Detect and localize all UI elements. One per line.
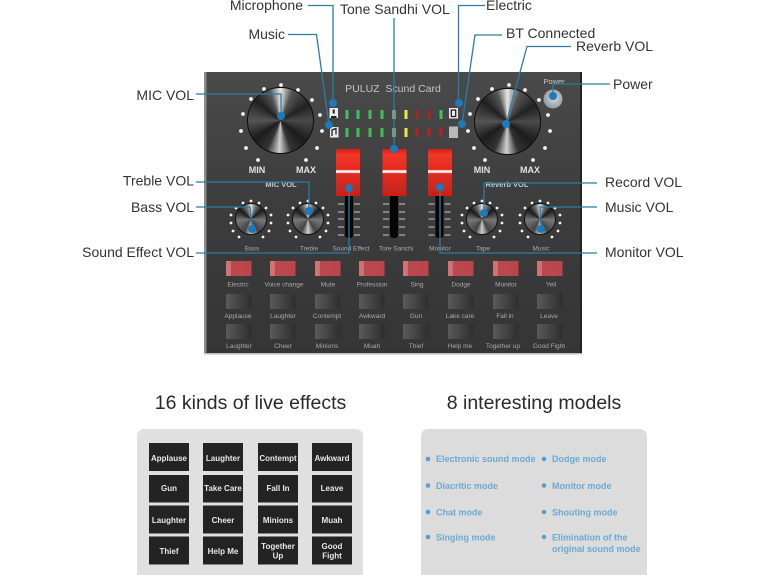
tick dots: right main knob bbox=[466, 83, 552, 162]
callout: BT Connected: BT Connected bbox=[506, 25, 595, 41]
control labels: Tape bbox=[476, 246, 490, 252]
knob: Reverb VOL bbox=[474, 88, 541, 155]
effect tile labels: Good bbox=[322, 542, 343, 551]
effect labels row 1: Lake care bbox=[446, 313, 475, 320]
tick dots: left main knob bbox=[239, 83, 324, 162]
knob scale labels: MAX bbox=[520, 165, 540, 175]
effect labels row 1: Awkward bbox=[359, 313, 386, 320]
section labels: Reverb VOL bbox=[486, 180, 529, 189]
model labels: Diacritic mode bbox=[436, 481, 498, 491]
mode button labels: Monitor bbox=[495, 282, 518, 288]
power label: Power bbox=[543, 77, 565, 86]
callout: Music VOL bbox=[537, 199, 674, 233]
effect labels row 1: Fall in bbox=[496, 313, 514, 320]
effect tile labels: Together bbox=[261, 542, 295, 551]
callout: Treble VOL: Treble VOL bbox=[123, 172, 194, 188]
effect tile labels: Fight bbox=[322, 552, 342, 560]
mode button labels: Yell bbox=[546, 282, 557, 288]
knob scale labels: MIN bbox=[249, 165, 265, 175]
effect tile labels: Help Me bbox=[208, 547, 239, 556]
knob: Music bbox=[524, 203, 556, 235]
icon: music indicator bbox=[330, 127, 338, 138]
mode button labels: Voice change bbox=[264, 282, 304, 288]
callout: Reverb VOL bbox=[502, 38, 653, 128]
effect tile labels: Awkward bbox=[315, 454, 350, 463]
callout: MIC VOL: MIC VOL bbox=[136, 87, 194, 103]
effect labels row 1: Leave bbox=[540, 313, 558, 320]
callout: Power: Power bbox=[613, 76, 653, 92]
callout: Record VOL: Record VOL bbox=[605, 174, 682, 190]
panel: models bbox=[421, 429, 647, 575]
callout: Sound Effect VOL bbox=[82, 184, 353, 260]
red mode buttons bbox=[226, 261, 562, 276]
LED meter bbox=[346, 110, 442, 137]
effect labels row 1 bbox=[224, 313, 558, 320]
callout: Monitor VOL: Monitor VOL bbox=[605, 244, 684, 260]
effect tile labels: Cheer bbox=[212, 516, 234, 525]
control labels: Monitor bbox=[429, 246, 452, 252]
callout: Music VOL: Music VOL bbox=[605, 199, 674, 215]
mode button labels: Sing bbox=[410, 282, 424, 288]
effect labels row 2 bbox=[226, 343, 565, 350]
dark effect buttons row 2 bbox=[226, 324, 562, 339]
callout: Monitor VOL bbox=[436, 183, 684, 260]
callout: MIC VOL bbox=[136, 87, 285, 120]
callout: BT Connected bbox=[458, 25, 595, 128]
knob scale labels: MIN bbox=[474, 165, 490, 175]
icon: microphone indicator bbox=[330, 108, 338, 118]
section labels: MIC VOL bbox=[265, 180, 297, 189]
heading: models: 8 interesting models bbox=[447, 392, 622, 414]
model labels: Dodge mode bbox=[552, 454, 607, 464]
knob: Bass bbox=[235, 203, 267, 235]
effect labels row 2: Laughter bbox=[226, 343, 253, 350]
power button bbox=[544, 90, 562, 108]
effect labels row 2: Cheer bbox=[274, 343, 293, 350]
model labels: Elimination of the bbox=[552, 532, 628, 542]
effect labels row 1: Contempt bbox=[313, 313, 341, 320]
card title: PULUZ Scund Card bbox=[345, 83, 441, 95]
section labels bbox=[265, 180, 529, 189]
control labels: Bass bbox=[245, 246, 260, 252]
model labels bbox=[436, 454, 641, 554]
control labels: Tore Sanchi bbox=[379, 246, 413, 252]
effect tile labels: Gun bbox=[161, 484, 177, 493]
knob scale labels: MAX bbox=[296, 165, 316, 175]
effect tile labels: Applause bbox=[151, 454, 188, 463]
effect labels row 2: Muah bbox=[364, 343, 381, 350]
effect labels row 1: Gun bbox=[410, 313, 423, 320]
effect tile labels: Take Care bbox=[204, 484, 242, 493]
panel: live effects bbox=[137, 429, 363, 575]
effect tile labels: Minions bbox=[263, 516, 294, 525]
effect labels row 2: Together up bbox=[486, 343, 521, 350]
effect tile labels: Thief bbox=[159, 547, 179, 556]
model labels: original sound mode bbox=[552, 544, 641, 554]
dark effect buttons row 1 bbox=[226, 294, 562, 309]
model labels: Chat mode bbox=[436, 508, 483, 518]
effect labels row 2: Thief bbox=[409, 343, 423, 350]
tick dots: small knobs bbox=[230, 200, 561, 238]
knob: Tape bbox=[466, 203, 498, 235]
fader tracks bbox=[338, 190, 450, 238]
effect tile labels: Muah bbox=[322, 516, 343, 525]
mode button labels: Profession bbox=[357, 282, 388, 288]
callout: Microphone bbox=[230, 0, 337, 107]
panel: sound card body bbox=[204, 72, 582, 354]
effect labels row 2: Minions bbox=[316, 343, 339, 350]
icon: electric indicator bbox=[449, 108, 458, 118]
effect tile labels: Laughter bbox=[152, 516, 186, 525]
effect tile labels: Fall In bbox=[266, 484, 290, 493]
callout: Tone Sandhi VOL bbox=[340, 1, 450, 153]
callout: Reverb VOL: Reverb VOL bbox=[576, 38, 653, 54]
callout: Sound Effect VOL: Sound Effect VOL bbox=[82, 244, 194, 260]
callout: Record VOL bbox=[480, 174, 682, 217]
model bullets bbox=[426, 457, 546, 539]
mode button labels: Mute bbox=[321, 282, 336, 288]
callout: Music: Music bbox=[248, 26, 285, 42]
heading: live effects: 16 kinds of live effects bbox=[155, 392, 346, 414]
effect tiles bbox=[149, 443, 352, 564]
effect tile labels: Laughter bbox=[206, 454, 240, 463]
callout: Bass VOL bbox=[131, 199, 256, 233]
effect tile labels: Leave bbox=[321, 484, 344, 493]
control labels bbox=[245, 246, 550, 252]
knob scale labels bbox=[249, 165, 540, 175]
mode button labels: Dodge bbox=[451, 282, 471, 288]
icon: bluetooth indicator bbox=[449, 126, 458, 138]
callout: Music bbox=[248, 26, 333, 129]
callout: Electric bbox=[455, 0, 532, 107]
mode button labels: Electric bbox=[227, 282, 249, 288]
effect tile labels: Contempt bbox=[259, 454, 297, 463]
model labels: Singing mode bbox=[436, 532, 496, 542]
effect labels row 2: Help me bbox=[448, 343, 472, 350]
model labels: Shouting mode bbox=[552, 508, 618, 518]
effect labels row 1: Laughter bbox=[270, 313, 297, 320]
knob: MIC VOL bbox=[247, 87, 314, 154]
mode button labels bbox=[227, 282, 557, 288]
knob: Treble bbox=[292, 203, 324, 235]
callout: Tone Sandhi VOL: Tone Sandhi VOL bbox=[340, 1, 450, 17]
control labels: Treble bbox=[300, 246, 318, 252]
model labels: Electronic sound mode bbox=[436, 454, 536, 464]
callout: Power bbox=[549, 76, 653, 100]
fader caps bbox=[336, 149, 452, 196]
effect tile labels: Up bbox=[273, 552, 283, 560]
callout: Bass VOL: Bass VOL bbox=[131, 199, 194, 215]
model labels: Monitor mode bbox=[552, 481, 612, 491]
effect tile labels bbox=[151, 454, 350, 560]
effect labels row 2: Good Fight bbox=[533, 343, 565, 350]
callout: Treble VOL bbox=[123, 172, 313, 215]
control labels: Music bbox=[533, 246, 550, 252]
control labels: Sound Effect bbox=[332, 246, 370, 252]
effect labels row 1: Applause bbox=[224, 313, 252, 320]
